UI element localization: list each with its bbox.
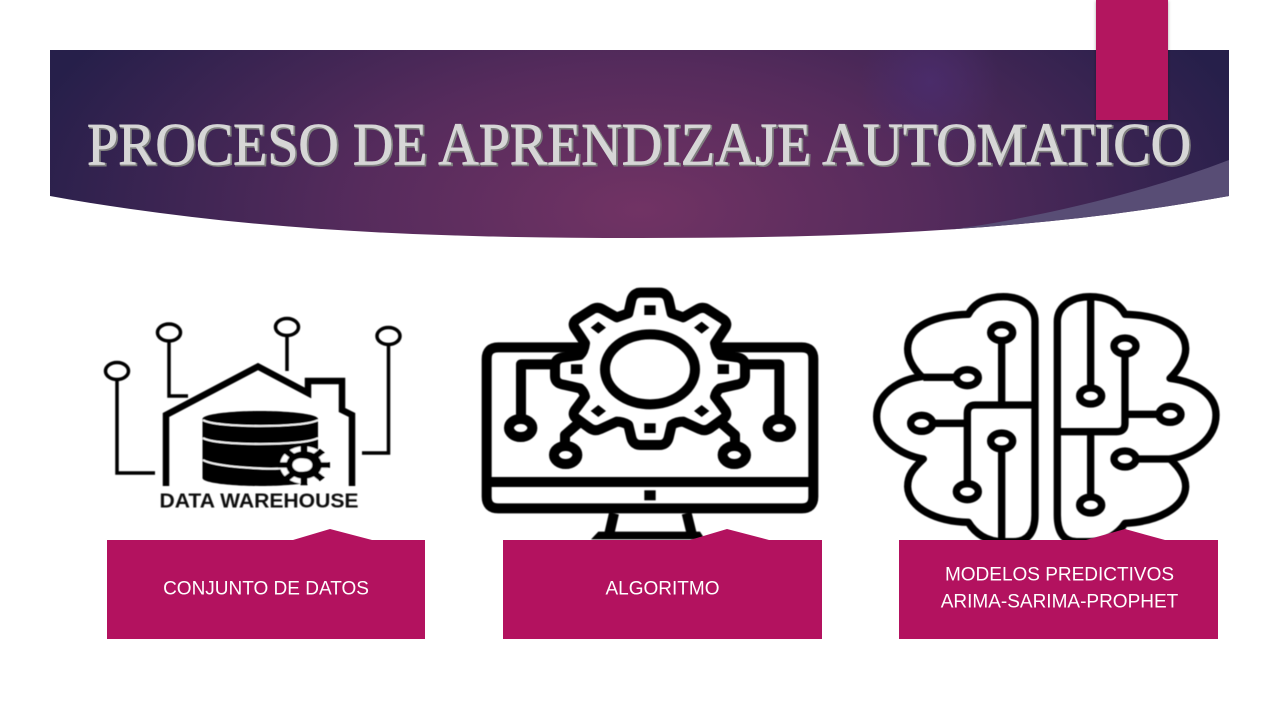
panel: modelos predictivos	[899, 529, 1218, 639]
title banner	[50, 50, 1229, 240]
monitor frame	[487, 347, 813, 508]
icon: data warehouse	[106, 318, 400, 512]
panel: modelos predictivos: ARIMA-SARIMA-PROPHET	[941, 592, 1179, 612]
house outline	[166, 366, 352, 486]
title: PROCESO DE APRENDIZAJE AUTOMATICO	[87, 112, 1191, 178]
gear marks	[571, 305, 729, 433]
icon: circuit brain	[877, 297, 1216, 542]
panel: conjunto de datos: CONJUNTO DE DATOS	[163, 578, 369, 600]
title: PROCESO DE APRENDIZAJE AUTOMATICO	[88, 112, 1192, 178]
large gear	[555, 293, 745, 445]
circuit traces	[521, 364, 779, 445]
banner swoosh	[952, 160, 1229, 230]
panel: modelos predictivos: MODELOS PREDICTIVOS	[945, 564, 1174, 586]
panel: conjunto de datos	[107, 529, 425, 639]
panel: algoritmo	[503, 529, 822, 639]
bookmark tab	[1096, 0, 1168, 120]
monitor stand	[609, 513, 692, 535]
small gear	[278, 445, 330, 485]
right hemisphere	[1057, 297, 1216, 542]
database cylinder	[202, 411, 318, 486]
data warehouse label: DATA WAREHOUSE	[160, 490, 358, 512]
panel: algoritmo: ALGORITMO	[605, 578, 720, 600]
left hemisphere	[877, 297, 1035, 542]
circuit nodes	[106, 318, 400, 473]
icon: monitor with gear	[487, 293, 813, 539]
